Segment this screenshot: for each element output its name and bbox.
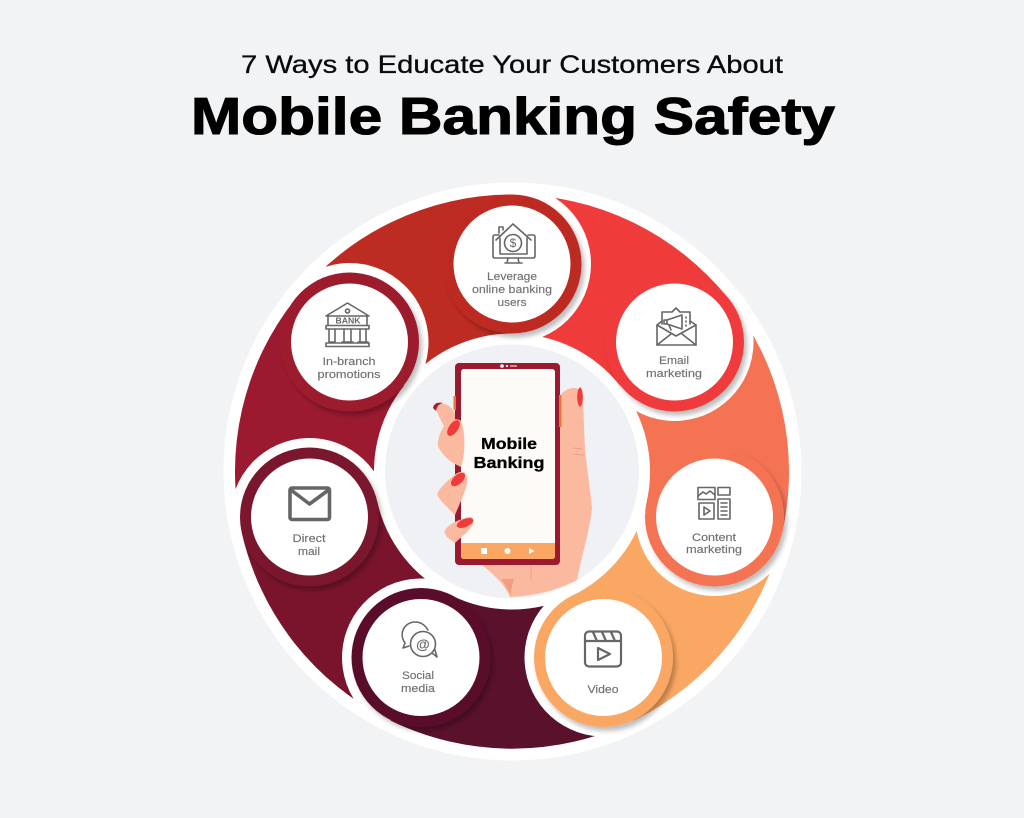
icon: house in monitor (493, 224, 535, 263)
item: leverage online banking users: users (498, 297, 527, 309)
main heading: Mobile Banking Safety (191, 88, 835, 146)
icon: content blocks (698, 488, 730, 519)
item: social media (352, 588, 490, 727)
item: content marketing (645, 448, 784, 586)
back finger (435, 404, 458, 436)
ring finger (445, 517, 473, 543)
fingers over phone (437, 418, 475, 543)
icon: bank building (326, 303, 369, 346)
ring nail (455, 516, 475, 530)
icon: clapper play (585, 632, 621, 666)
icon: envelope (290, 488, 330, 520)
index nail (445, 418, 462, 438)
side buttons (454, 396, 456, 410)
item: content marketing: marketing (686, 544, 742, 556)
segment: leverage online banking users (295, 194, 512, 386)
hand holding phone (433, 388, 592, 597)
item: leverage online banking users: $ (510, 236, 517, 250)
segment: in-branch promotions (235, 299, 404, 532)
screen label: Mobile (481, 436, 537, 453)
white halos (215, 185, 792, 763)
item: video (534, 588, 673, 727)
subtitle: 7 Ways to Educate Your Customers About (241, 51, 783, 79)
item: in-branch promotions: In-branch (322, 356, 376, 368)
item: social media: media (401, 683, 436, 695)
title (191, 51, 835, 146)
item: social media: Social (402, 670, 434, 682)
centre grey disc (385, 344, 639, 598)
segment: video (573, 502, 782, 720)
item: leverage online banking users: online banking (472, 284, 552, 296)
item: in-branch promotions: BANK (336, 316, 361, 326)
index finger (438, 419, 464, 467)
screen (461, 369, 555, 559)
middle nail (449, 470, 467, 489)
middle finger (437, 472, 467, 515)
thumb nail (577, 388, 583, 406)
item: email marketing (605, 272, 744, 412)
screen bottom bar (461, 543, 555, 559)
thumb creases (573, 448, 584, 455)
item: video: Video (588, 684, 618, 696)
item: social media: @ (416, 636, 430, 652)
icon: chat bubbles (402, 622, 437, 657)
outer white disc (224, 182, 802, 760)
item: content marketing: Content (692, 532, 736, 544)
segment: email marketing (512, 194, 729, 386)
segment: direct mail (242, 502, 451, 720)
icon: envelope with megaphone (657, 308, 696, 345)
item: email marketing: Email (659, 355, 689, 367)
speaker (500, 364, 504, 368)
ring segments (235, 194, 789, 749)
item: direct mail (240, 448, 379, 586)
segment: content marketing (620, 299, 789, 532)
item: in-branch promotions (280, 272, 419, 412)
palm and thumb (478, 388, 592, 597)
segment: social media (390, 596, 634, 749)
phone (454, 363, 562, 565)
item: direct mail: Direct (292, 533, 326, 545)
item: leverage online banking users (442, 194, 582, 334)
item: leverage online banking users: Leverage (487, 271, 537, 283)
item: email marketing: marketing (646, 368, 702, 380)
palm crease (501, 579, 514, 597)
item: direct mail: mail (298, 546, 320, 558)
item: in-branch promotions: promotions (318, 369, 381, 381)
phone: Banking (474, 455, 544, 472)
